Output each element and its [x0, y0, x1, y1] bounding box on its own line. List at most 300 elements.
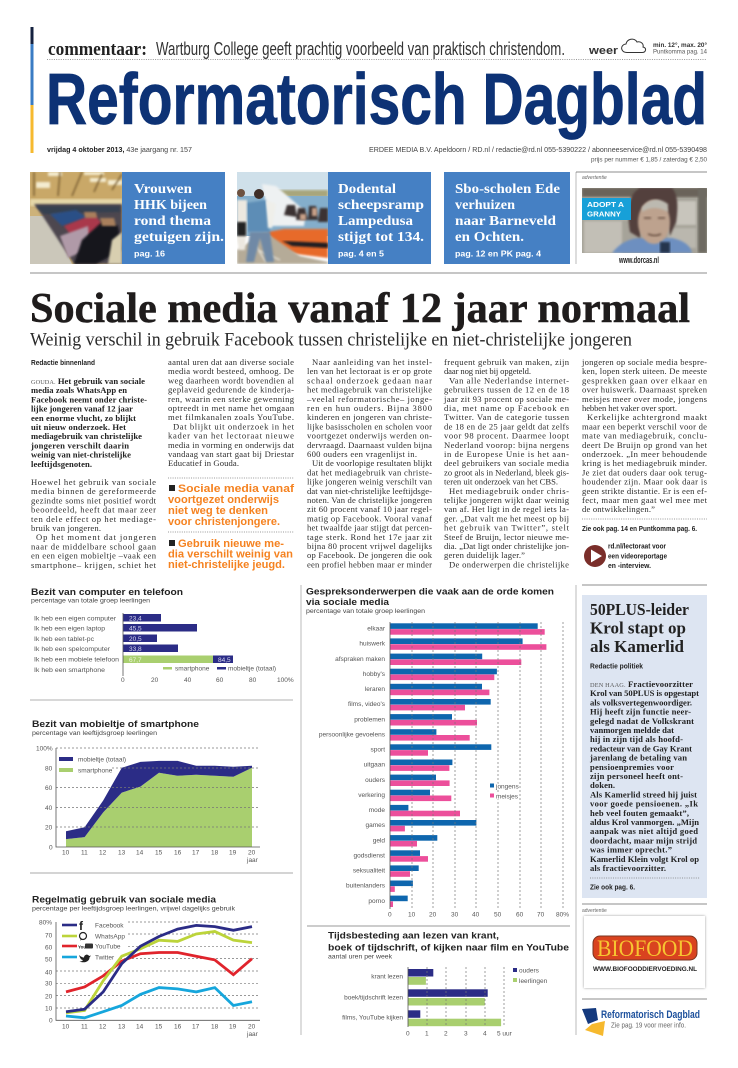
article intro: Facebook neemt onder christe- — [31, 394, 147, 404]
article column 3: zit 60 procent vanaf 10 jaar regel- — [307, 504, 432, 514]
article column 2: geplaveid gedurende de kinderja- — [168, 385, 294, 395]
logo: BIOFOOD — [597, 936, 693, 961]
article column 5: onderzoek. „In meer behoudende — [582, 449, 707, 459]
y axis labels: 80% — [39, 920, 52, 926]
line: Twitter — [66, 988, 252, 1018]
icon: whatsapp — [80, 932, 86, 940]
x axis labels: 10 — [62, 1024, 70, 1030]
text box: Vrouwen — [134, 182, 192, 197]
y axis labels: 70 — [45, 932, 53, 940]
legend: meisjes — [496, 794, 519, 800]
article column 5: hebben het vaker over sport. — [582, 403, 677, 413]
axis: 80 — [249, 677, 257, 684]
article text: als fractievoorzitter. — [590, 863, 666, 873]
article column 3: het mediagebruik van christelijke — [307, 385, 432, 395]
teaser: Lampedusa — [237, 172, 431, 264]
icon: youtube: You — [78, 944, 86, 950]
article column 4: de 18 en de 25 jaar geldt dat zelfs — [444, 421, 570, 431]
axis: 0 — [121, 677, 125, 684]
article column 4: ger. „Dat valt me het meest op bij — [444, 513, 569, 523]
heading: Bezit van mobieltje of smartphone — [32, 719, 199, 730]
article column 4: het gebruik van Twitter”, stelt — [444, 523, 570, 533]
axis labels: 0 — [388, 912, 392, 918]
row labels: geld — [373, 837, 385, 844]
date line: ERDEE MEDIA B.V. Apeldoorn / RD.nl / redactie@rd.nl 055-5390222 / abonneeservice@rd.nl 055-5390498 — [369, 147, 707, 154]
article column 5: de ontwikkelingen.” — [582, 504, 655, 514]
text box: getuigen zijn. — [134, 230, 224, 245]
row labels: mode — [369, 807, 385, 814]
row labels: Ik heb een tablet-pc — [34, 636, 95, 643]
article column 3: op Facebook. De jongeren die ook — [307, 550, 433, 560]
article column 4: teren uit onderzoek van het CBS. — [444, 477, 558, 487]
heading — [32, 719, 199, 737]
article column 4: Steef de Bruijn, lector nieuwe me- — [444, 532, 569, 542]
icon: facebook: f — [79, 919, 84, 933]
row labels: persoonlijke gevoelens — [319, 731, 386, 738]
article column 1: bruik van jongeren. — [31, 523, 101, 533]
text box: rond thema — [134, 214, 211, 229]
x axis labels: 13 — [118, 850, 126, 856]
pull quotes: voor christenjongere. — [168, 516, 280, 528]
article column 3: tage sterk. Rond het 17e jaar zit — [307, 532, 433, 542]
pull quotes: niet weg te denken — [168, 505, 268, 517]
photo: rescue boat — [237, 172, 328, 264]
axis labels: 1 — [425, 1030, 429, 1038]
article column 4: daar nog niet bij opgeteld. — [444, 366, 531, 376]
heading: aantal uren per week — [328, 954, 393, 960]
line: YouTube — [66, 952, 252, 992]
legend: leerlingen — [519, 978, 548, 985]
y axis labels: 40 — [45, 805, 53, 812]
y axis labels: 50 — [45, 956, 53, 964]
heading — [306, 586, 554, 615]
article column 1: Op het moment dat jongeren — [36, 532, 157, 542]
article intro: weinig van niet-christelijke — [31, 450, 131, 460]
row labels: ouders — [365, 777, 386, 784]
weather: min. 12°, max. 20° — [653, 43, 708, 49]
row labels: boek/tijdschrift lezen — [344, 994, 403, 1002]
article text: gelegd nadat de Volkskrant — [590, 716, 694, 726]
legend: smartphone — [78, 768, 113, 774]
legend: mobieltje (totaal) — [228, 666, 276, 672]
heading — [32, 894, 236, 912]
y axis labels: 40 — [45, 970, 53, 976]
teaser: Sbo-scholen — [444, 172, 570, 264]
article column 3: schaal onderzoek gedaan naar — [307, 375, 432, 385]
row labels: hobby's — [363, 671, 386, 678]
video link: een videoreportage — [608, 554, 667, 560]
house advert — [582, 1008, 700, 1036]
main headline: Sociale media vanaf 12 jaar normaal — [30, 286, 690, 332]
heading: Bezit van computer en telefoon — [31, 587, 183, 598]
article column 3: het twaalfde jaar stijgt dat percen- — [307, 523, 432, 533]
article column 5: maar een beperkt verschil voor de — [582, 421, 707, 431]
legend: smartphone — [175, 666, 210, 672]
x axis labels: 16 — [174, 850, 182, 856]
area: mobieltje — [66, 761, 252, 839]
axis labels: 0 — [406, 1030, 410, 1038]
x axis labels: 11 — [81, 1024, 88, 1030]
chart: Bezit van computer en telefoon — [31, 587, 294, 684]
article column 1: media binnen de gereformeerde — [31, 486, 156, 496]
text box — [122, 172, 225, 264]
pull quotes: voortgezet onderwijs — [168, 494, 279, 506]
article column 1: en een eigen mobieltje –vaak een — [31, 551, 157, 561]
article text: pensioenpremies voor — [590, 762, 674, 772]
axis labels: 20 — [429, 912, 437, 918]
article text: doordacht, maar mijn strijd — [590, 835, 697, 845]
row labels: huiswerk — [359, 641, 386, 648]
article column 1: beoordeeld, heeft dat maar zeer — [31, 505, 156, 515]
article column 2: Dat blijkt uit onderzoek in het — [173, 421, 295, 431]
pull quotes — [168, 478, 294, 571]
house advert: Zie pag. 19 voor meer info. — [611, 1022, 686, 1030]
row labels: krant lezen — [371, 974, 403, 980]
article column 3: Naar aanleiding van het instel- — [312, 357, 432, 367]
y axis labels: 0 — [49, 844, 53, 852]
article column 2: ren, waarin een sterke gewenning — [168, 394, 295, 404]
article column 5: over huiswerk. Daarnaast spreken — [582, 385, 708, 395]
article column 5: houdender zijn. Maar ook daar is — [582, 477, 708, 487]
photo: elderly woman — [582, 188, 707, 253]
row labels: leraren — [365, 686, 385, 693]
bars jongens — [390, 623, 538, 901]
article intro — [30, 376, 147, 469]
article column 1: gezindte soms niet positief wordt — [31, 495, 157, 505]
x axis labels: 14 — [136, 1024, 144, 1030]
article column 4: dia, met name op Facebook en — [444, 403, 570, 413]
article text: zijn personeel heeft ont- — [590, 771, 683, 781]
heading: als Kamerlid — [590, 637, 684, 656]
article column 3 — [306, 357, 433, 569]
x axis labels: 13 — [118, 1024, 126, 1030]
article column 3: dat het mediagebruik van christe- — [307, 467, 432, 477]
heading: percentage van totale groep leerlingen — [306, 608, 426, 615]
bars: 84,5 — [218, 657, 231, 664]
bars — [408, 969, 501, 1026]
text box: stijgt tot 134. — [338, 230, 424, 245]
row labels: afspraken maken — [335, 656, 385, 663]
row labels: elkaar — [367, 626, 386, 632]
article intro: leeftijdsgenoten. — [31, 459, 92, 469]
article column 3: bijna 80 procent vrijwel dagelijks — [307, 541, 433, 551]
adopt a granny label — [582, 198, 631, 220]
y axis labels: 100% — [36, 746, 53, 752]
text box: Dodental — [338, 182, 396, 197]
article text: doken. — [590, 780, 615, 790]
advertisement: Dorcas — [576, 172, 707, 266]
axis labels — [388, 912, 569, 918]
article column 1: Hoewel het gebruik van sociale — [31, 477, 156, 487]
bars: 20,5 — [129, 636, 142, 643]
article text: Als Kamerlid streed hij juist — [590, 789, 697, 799]
article column 5: kring is het mediagebruik minder. — [582, 458, 707, 468]
heading: percentage van totale groep leerlingen — [31, 598, 151, 604]
heading — [31, 587, 183, 604]
legend: Facebook — [95, 922, 124, 930]
article column 5: meisjes meer over mode, jongens — [582, 394, 708, 404]
advertisement: Dorcas: advertentie — [582, 175, 607, 181]
bars: 67,7 — [129, 657, 142, 664]
text box — [328, 172, 431, 264]
row labels: Ik heb een mobiele telefoon — [34, 656, 119, 664]
row labels: games — [365, 822, 386, 829]
y axis labels: 10 — [45, 1006, 53, 1012]
bars: 33,8 — [129, 646, 142, 653]
text box: scheepsramp — [338, 198, 424, 213]
axis labels: 50 — [494, 912, 502, 918]
commentaar line: Wartburg College geeft prachtig voorbeeld van praktisch christendom. — [156, 39, 565, 59]
row labels: buitenlanders — [346, 883, 386, 890]
article text — [589, 679, 699, 873]
x axis labels: jaar — [246, 857, 259, 864]
reference: Zie ook pag. 6. — [590, 882, 635, 892]
axis: 100% — [277, 677, 294, 684]
chart: Bezit van mobieltje of smartphone — [32, 719, 260, 864]
article column 4: in de Europese Unie is het aan- — [444, 449, 569, 459]
legend: YouTube — [95, 944, 121, 950]
x axis labels: 15 — [155, 1024, 163, 1030]
article column 4: dia. „Dat ligt onder christelijke jon- — [444, 541, 569, 551]
article column 3: een profiel hebben maar er minder — [307, 559, 432, 569]
heading: percentage van leeftijdsgroep leerlingen — [32, 730, 158, 737]
axis labels: 2 — [444, 1030, 448, 1038]
article column 4: gebruikers tussen de 12 en de 18 — [444, 385, 569, 395]
article column 4: Nederland voorop: bijna nergens — [444, 440, 570, 450]
article intro: jongeren verschilt daarin — [30, 440, 129, 450]
bars — [123, 614, 233, 664]
article column 2: vandaag van start gaat bij Driestar — [168, 449, 294, 459]
article column 2: media wordt besteed, omhoog. De — [168, 366, 294, 376]
pull quotes: dia verschilt weinig van — [168, 548, 293, 560]
article column 4: telijke jongeren wijkt daar weinig — [444, 495, 570, 505]
heading — [590, 600, 689, 656]
article column 3: Uit de voorlopige resultaten blijkt — [312, 458, 433, 468]
legend: mobieltje (totaal) — [78, 756, 126, 764]
article column 4: deel gebruikers van sociale media — [444, 458, 569, 468]
article text: DEN HAAG. Fractievoorzitter — [590, 679, 693, 689]
commentaar line — [48, 39, 565, 60]
article reference: Zie ook pag. 14 en Puntkomma pag. 6. — [582, 524, 697, 533]
teaser: Sbo-scholen: pag. 12 en PK pag. 4 — [455, 248, 541, 258]
teaser: Sbo-scholen: verhuizen — [455, 198, 515, 213]
legend: jongens — [495, 784, 520, 790]
article text: voor goede pensioenen. „Ik — [590, 799, 698, 809]
article column 2: aantal uren dat aan diverse sociale — [168, 357, 294, 367]
chart: Gespreksonderwerpen — [306, 586, 569, 918]
icon: cloud — [622, 39, 646, 52]
article intro: GOUDA. Het gebruik van sociale — [31, 376, 145, 386]
text box: pag. 4 en 5 — [338, 248, 384, 258]
x axis labels: 16 — [174, 1024, 182, 1030]
article column 3: lijke jongeren weinig verschilt van — [307, 477, 433, 487]
x axis labels: 19 — [229, 1024, 237, 1030]
x axis labels: 20 — [248, 1024, 256, 1030]
x axis labels: 12 — [99, 850, 107, 856]
commentaar line: commentaar: — [48, 39, 147, 60]
heading: percentage per leeftijdsgroep leerlingen, vrijwel dagelijks gebruik — [32, 906, 236, 912]
row labels: seksualiteit — [353, 868, 385, 875]
article column 3: dat van niet-christelijke leeftijdsge- — [307, 486, 432, 496]
article column 5: deert De Bruijn op grond van het — [582, 440, 708, 450]
row labels: verkering — [358, 792, 385, 799]
teaser: Vrouwen HHK — [30, 172, 225, 264]
axis labels: 80% — [556, 912, 569, 918]
y axis labels: 60 — [45, 785, 53, 792]
adopt a granny label: GRANNY — [587, 210, 621, 218]
article column 5: fect, maar men gaat wel mee met — [582, 495, 708, 505]
article column 5: ken, lopen sterk uiteen. De meeste — [582, 366, 707, 376]
article intro: mediagebruik van christelijke — [31, 431, 142, 441]
byline: Redactie politiek — [590, 662, 644, 670]
article column 5: jongeren op sociale media bespre- — [581, 357, 707, 367]
x axis labels: 15 — [155, 850, 163, 856]
x axis labels: 19 — [229, 850, 237, 856]
weather — [588, 39, 708, 57]
article text: was immer oprecht.” — [590, 845, 672, 855]
article column 5: mate van mediagebruik, conclu- — [582, 431, 707, 441]
article text: aanpak was niet altijd goed — [590, 826, 698, 836]
house advert: Reformatorisch Dagblad — [601, 1009, 700, 1021]
article column 2: met filmkanalen zoals YouTube. — [168, 412, 294, 422]
article column 3: ren en hun ouders. Bijna 3800 — [307, 403, 432, 413]
date line: prijs per nummer € 1,85 / zaterdag € 2,50 — [591, 156, 707, 164]
x axis labels: 10 — [62, 850, 70, 856]
article text: hij in zijn tijd als hoofd- — [590, 734, 683, 744]
weather: Puntkomma pag. 14 — [653, 50, 708, 56]
axis — [121, 613, 294, 684]
article column 4: zo groot als in Nederland, bleek gis- — [444, 467, 569, 477]
article column 3: kinderen en jongeren van christe- — [307, 412, 432, 422]
date line — [47, 147, 707, 164]
icon: RD logo — [582, 1008, 605, 1036]
heading: Krol stapt op — [590, 618, 686, 638]
adopt a granny label: ADOPT A — [587, 200, 625, 209]
row labels — [319, 626, 386, 905]
y axis labels: 0 — [49, 1018, 53, 1024]
article column 5: gesprekken gaan over elkaar en — [582, 375, 708, 385]
article column 4: De onderwerpen die christelijke — [449, 559, 569, 569]
article column 5: geen strikte distantie. Er is een ef- — [582, 486, 707, 496]
x axis labels: 20 — [248, 850, 256, 856]
axis: 60 — [216, 677, 224, 684]
teaser: Sbo-scholen: Sbo-scholen Ede — [455, 182, 560, 197]
row labels: films, video's — [348, 701, 386, 708]
heading — [328, 930, 569, 960]
teaser: Sbo-scholen: naar Barneveld — [455, 214, 556, 229]
article text: Hij heeft zijn functie neer- — [590, 707, 691, 717]
article column 4: geren duidelijk lager.” — [444, 550, 525, 560]
axis labels: 60 — [516, 912, 524, 918]
y axis labels: 60 — [45, 944, 53, 952]
article text: Kamerlid Klein volgt Krol op — [590, 854, 699, 864]
masthead — [30, 27, 708, 164]
article column 3: matig op Facebook. Vooral vanaf — [307, 513, 432, 523]
article intro: uit nieuw onderzoek. Het — [31, 422, 126, 432]
y axis labels — [39, 920, 53, 1024]
article column 2: kader van het lectoraat nieuwe — [168, 431, 294, 441]
text box: Lampedusa — [338, 214, 413, 229]
legend — [163, 666, 276, 672]
article text: heb veel fouten gemaakt”, — [590, 808, 689, 818]
x axis labels: 18 — [211, 850, 219, 856]
bars meisjes — [390, 629, 546, 907]
row labels — [342, 974, 403, 1022]
article text: als volksvertegenwoordiger. — [590, 697, 692, 707]
article column 3: lijke basisscholen en scholen voor — [307, 421, 432, 431]
axis labels: 40 — [472, 912, 480, 918]
line: WhatsApp — [66, 932, 252, 1013]
teaser: Sbo-scholen: en Ochten. — [455, 230, 524, 245]
weather: weer — [588, 45, 619, 57]
legend: Twitter — [95, 954, 115, 962]
bars: 45,5 — [129, 626, 142, 632]
article column 4: Twitter. Van de categorie tussen — [444, 412, 570, 422]
video link: en -interview. — [608, 563, 651, 570]
y axis labels: 20 — [45, 824, 53, 832]
row labels: sport — [371, 746, 385, 754]
article column 5 — [581, 357, 708, 514]
advertisement: Biofood: WWW.BIOFOODDIERVOEDING.NL — [593, 967, 697, 973]
heading: boek of tijdschrift, of kijken naar film en YouTube — [328, 942, 569, 954]
row labels: Ik heb een smartphone — [34, 667, 105, 674]
x axis labels — [62, 1024, 259, 1038]
icon: twitter — [79, 955, 91, 962]
byline: Redactie binnenland — [31, 358, 95, 367]
article column 3: –veelal reformatorische– jonge- — [306, 394, 432, 404]
chart: Regelmatig gebruik van sociale media — [32, 894, 260, 1038]
legend: WhatsApp — [95, 934, 125, 940]
text box: HHK bijeen — [134, 198, 207, 213]
x axis labels: 12 — [99, 1024, 107, 1030]
article column 4: voor 98 procent. Daarmee loopt — [444, 431, 570, 441]
article column 3: voortgezet onderwijs werden on- — [307, 431, 432, 441]
axis labels — [406, 1030, 513, 1038]
row labels — [34, 616, 119, 674]
sub headline: Weinig verschil in gebruik Facebook tussen christelijke en niet-christelijke jongeren — [30, 330, 632, 350]
panel: 50PLUS — [582, 585, 707, 898]
article column 2: media in vorming en onderwijs dat — [168, 440, 295, 450]
axis labels: 30 — [451, 912, 459, 918]
x axis labels: 17 — [192, 850, 200, 856]
chart: Tijdsbesteding — [328, 930, 569, 1038]
row labels: godsdienst — [354, 852, 385, 860]
advertisement: Dorcas: www.dorcas.nl — [618, 255, 659, 266]
y axis labels: 80 — [45, 766, 53, 772]
x axis labels — [62, 850, 259, 864]
article column 4: Het mediagebruik onder chris- — [449, 486, 569, 496]
date line: vrijdag 4 oktober 2013, 43e jaargang nr. 157 — [47, 147, 192, 154]
x axis labels: 17 — [192, 1024, 200, 1030]
article column 4: frequent gebruik van maken, zijn — [444, 357, 570, 367]
article text: aldus Krol vanmorgen. „Mijn — [590, 817, 699, 827]
article text: jarenlang de betaling van — [589, 753, 687, 763]
advertisement: Biofood — [582, 904, 707, 988]
pull quotes: niet-christelijke jeugd. — [168, 559, 285, 571]
row labels: Ik heb een spelcomputer — [34, 646, 111, 653]
y axis labels: 20 — [45, 994, 53, 1000]
y axis labels: 30 — [45, 980, 53, 988]
axis labels: 5 uur — [497, 1030, 513, 1038]
axis labels: 4 — [483, 1030, 487, 1038]
heading: Regelmatig gebruik van sociale media — [32, 894, 217, 906]
article column 3: noten. Van de christelijke jongeren — [307, 495, 433, 505]
colour bar — [30, 27, 34, 153]
row labels: films, YouTube kijken — [342, 1014, 403, 1022]
x axis labels: 11 — [81, 850, 88, 856]
x axis labels: 18 — [211, 1024, 219, 1030]
y axis labels — [36, 746, 53, 852]
